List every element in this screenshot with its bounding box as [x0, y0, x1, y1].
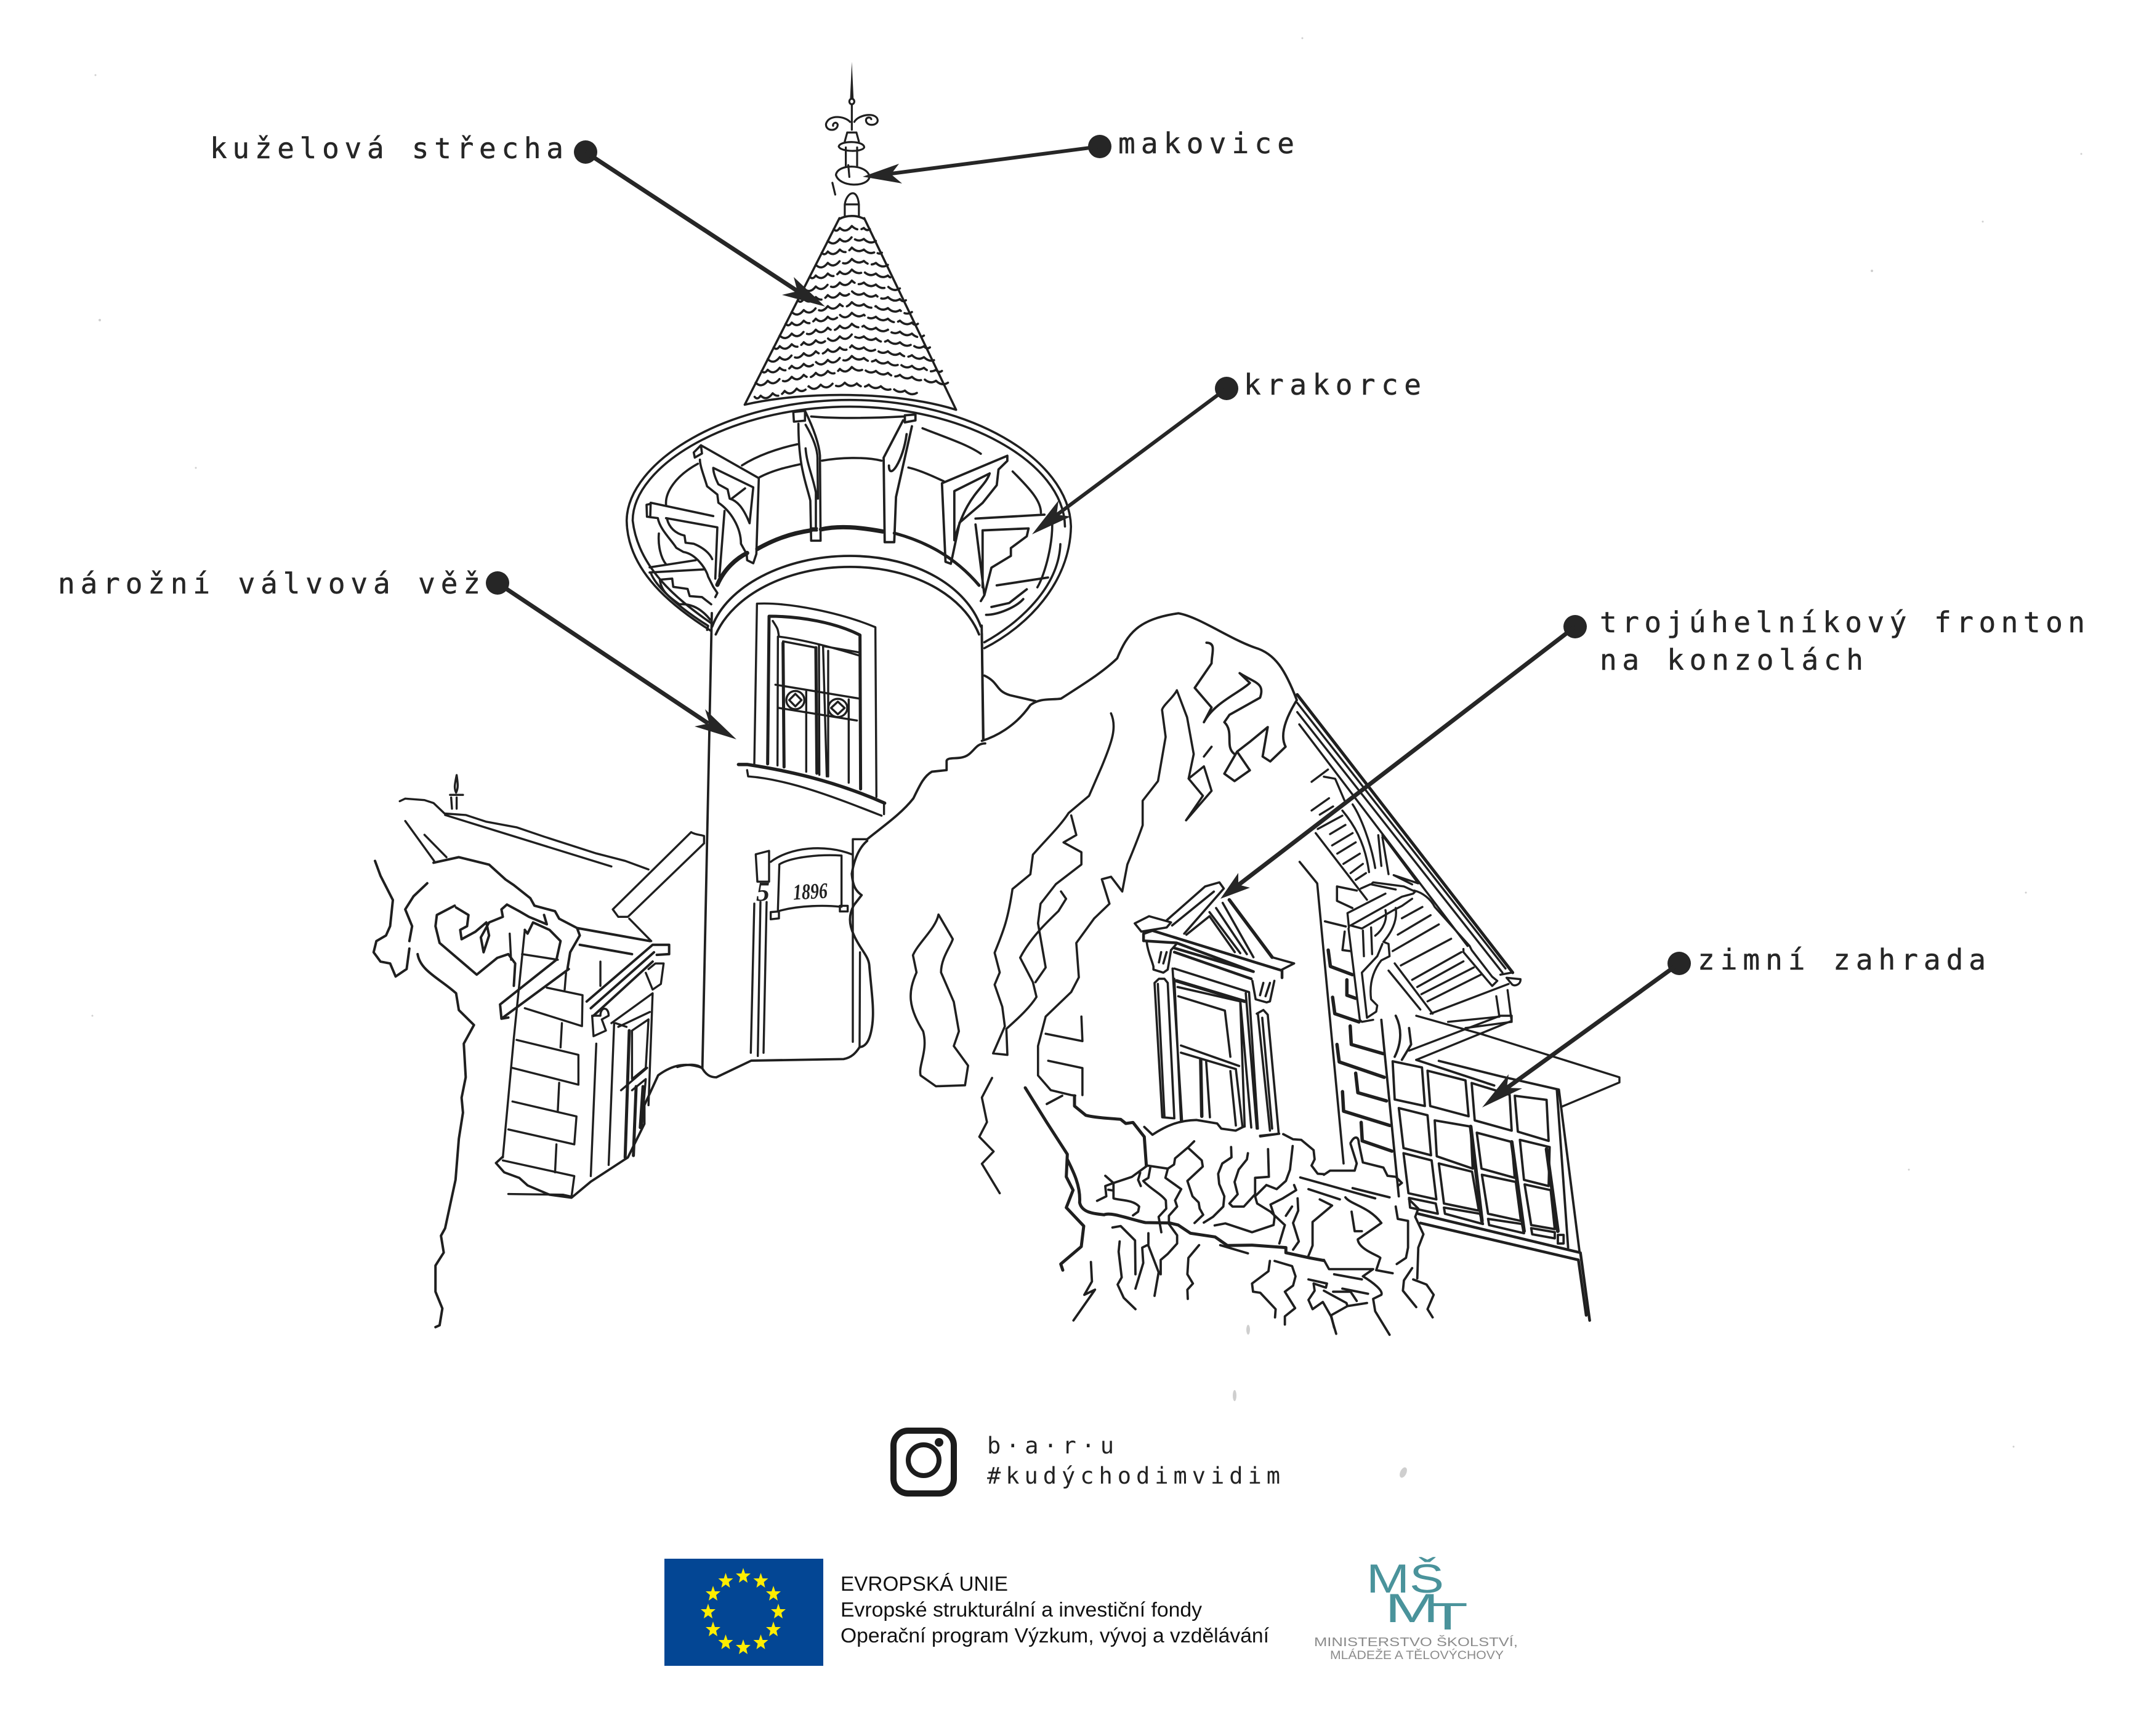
callout: nárožní válvová věž: nárožní válvová věž [58, 567, 480, 600]
tower shaft, window and entrance [677, 603, 985, 1077]
ivy masses on the right [911, 613, 1297, 1193]
year 1896: 1896 [792, 878, 828, 904]
canopy [1409, 1016, 1619, 1107]
callout: krakorce: krakorce [1244, 368, 1421, 401]
diagonal bracket [694, 445, 759, 563]
brackets on the left [647, 411, 882, 630]
callout: krakorce [1032, 368, 1421, 534]
callout: trojúhelníkový fronton na konzolách: trojúhelníkový fronton [1600, 606, 2085, 639]
callout: kuželová střecha: kuželová střecha [210, 132, 563, 165]
EU text: EVROPSKÁ UNIE [841, 1572, 1008, 1595]
side wall with stone quoins [1300, 862, 1357, 1163]
EU text: Operační program Výzkum, vývoj a vzdělávání [841, 1624, 1269, 1647]
lower bracket [650, 560, 711, 630]
outermost bracket [647, 503, 725, 597]
conical roof outline [744, 216, 956, 410]
ivy outline left [374, 857, 650, 1327]
pediment [1135, 882, 1294, 970]
thick tower ring [717, 527, 882, 585]
logo: MŠMT ministry: MŠ [1366, 1556, 1444, 1601]
tower walls [703, 613, 983, 1069]
stone quoins [503, 930, 583, 1197]
lower roof ridge [400, 798, 648, 869]
logo: MŠMT ministry [1314, 1556, 1518, 1662]
social handle text: #kudýchodimvidim [987, 1463, 1280, 1489]
ivy main contour [982, 613, 1297, 781]
ivy edge by the door [850, 744, 985, 1047]
logo: EU flag [664, 1559, 823, 1666]
central bracket [793, 411, 821, 540]
gable roof eave and console [1297, 694, 1520, 1028]
wing base [496, 1065, 702, 1198]
tower window [738, 603, 885, 816]
small finial [450, 775, 463, 809]
logo: MŠMT ministry: M [1385, 1585, 1439, 1631]
glass panes [1393, 1061, 1563, 1244]
callout: kuželová střecha [210, 132, 825, 307]
ivy around the sill [1324, 1016, 1433, 1335]
cornice [1143, 931, 1282, 979]
tower base [677, 1047, 860, 1077]
callout: nárožní válvová věž [58, 567, 736, 739]
winter garden glazing [1324, 1016, 1619, 1335]
callout: zimní zahrada: zimní zahrada [1698, 943, 1986, 976]
tower roof, eave and right brackets [627, 62, 1071, 648]
circular eave [627, 400, 1071, 648]
callout: makovice [863, 127, 1294, 183]
roof shingles [755, 226, 948, 398]
small window and cornice [565, 945, 669, 1176]
ivy roots below the dormer [1025, 1088, 1340, 1334]
window frame and pilasters [1155, 968, 1279, 1136]
eave lines [1297, 694, 1513, 973]
sill and lower frame [1418, 1214, 1590, 1320]
corbels [1147, 943, 1275, 1002]
logo: MŠMT ministry: MLÁDEŽE A TĚLOVÝCHOVY [1330, 1649, 1504, 1662]
console bracket [1347, 882, 1415, 1022]
dormer window with triangular pediment [1135, 862, 1392, 1163]
brackets on the right [884, 414, 1048, 615]
logo: MŠMT ministry: MINISTERSTVO ŠKOLSTVÍ, [1314, 1635, 1518, 1649]
social handle text [987, 1433, 1280, 1489]
icon: instagram [893, 1431, 954, 1493]
ivy vines [979, 690, 1212, 1193]
spire finial [826, 62, 877, 216]
root contours [1025, 1088, 1324, 1270]
ivy lobe [911, 915, 968, 1087]
tower collar [712, 556, 981, 635]
soffit slats [1312, 770, 1481, 1002]
soffit arcs [659, 444, 882, 565]
illustration: corner tower building [374, 62, 1619, 1335]
callout: trojúhelníkový fronton na konzolách: na konzolách [1600, 643, 1863, 677]
EU text [841, 1572, 1269, 1647]
social handle text: b·a·r·u [987, 1433, 1114, 1459]
EU text: Evropské strukturální a investiční fondy [841, 1598, 1203, 1621]
root tendrils [1073, 1141, 1336, 1334]
logo: MŠMT ministry: T [1427, 1596, 1468, 1638]
roof beam [613, 832, 704, 941]
callout: zimní zahrada [1482, 943, 1986, 1107]
callout: trojúhelníkový fronton na konzolách [1220, 606, 2085, 899]
left wing with window and ivy [374, 775, 704, 1327]
callout: makovice: makovice [1118, 127, 1294, 160]
entrance and date plaque [751, 839, 867, 1056]
house number 5: 5 [756, 877, 770, 907]
